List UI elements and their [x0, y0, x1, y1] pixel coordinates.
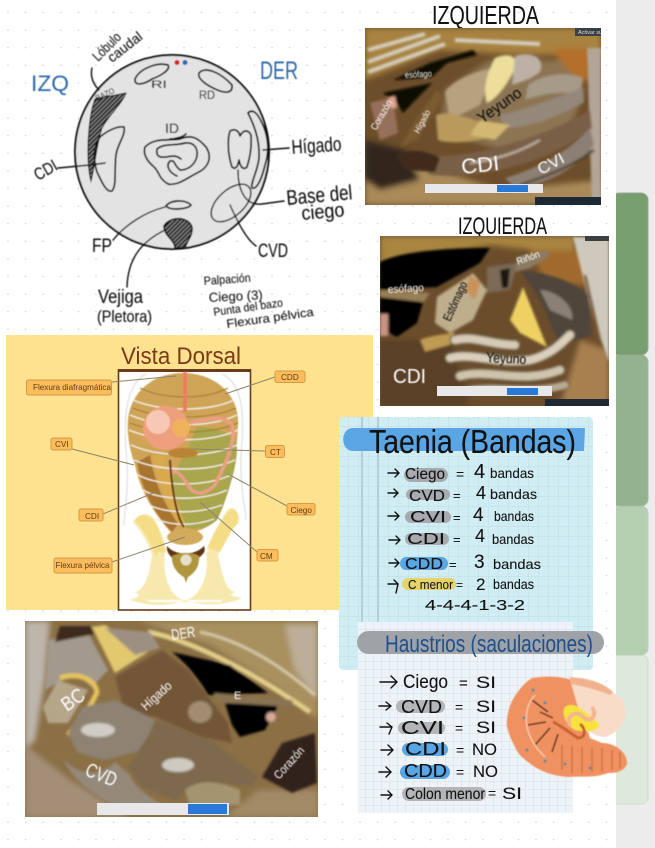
row: CDI: bandas: [492, 531, 534, 547]
photo labels: Yeyuno: [475, 85, 525, 127]
heading: IZQ: IZQ: [31, 71, 69, 96]
title bar: [343, 428, 585, 451]
pale stripes top left: [368, 34, 540, 72]
organ: CDI: [95, 127, 124, 191]
photo labels: esófago: [388, 282, 424, 296]
organ: small intestine ID: ID: [165, 120, 179, 136]
note: palpation list: Palpación: [203, 271, 251, 288]
row: CVI: 4: [473, 505, 484, 526]
organ: RD kidney: [199, 70, 232, 102]
row: CDI: =: [453, 532, 461, 547]
esophagus: [183, 372, 187, 412]
panel: Haustrios (saculaciones): [357, 622, 604, 813]
row: Ciego: Ciego: [405, 466, 445, 483]
row: CDI: CDI: [407, 531, 445, 548]
label: Flexura diafragmática: Flexura diafragmática: [33, 383, 111, 392]
label: Flexura pélvica: [54, 558, 112, 573]
row: CDD: CDD: [405, 556, 443, 573]
row: Colon menor: [381, 784, 522, 803]
photo labels: Estómago: [440, 279, 471, 323]
organ: right crescent: [248, 111, 268, 188]
row: Colon menor: Colon menor: [405, 786, 486, 803]
aorta and vena cava dots: [174, 60, 188, 65]
note: palpation list: [203, 271, 315, 331]
label: Lóbulo caudal: caudal: [104, 28, 145, 65]
row: CVI: SI: [476, 718, 496, 737]
row: Ciego: =: [459, 675, 468, 692]
row: C menor: bandas: [493, 576, 534, 592]
label: Base del ciego: Base del: [285, 181, 353, 210]
title: Taenia (Bandas): [369, 423, 576, 460]
row: Ciego: 4: [474, 461, 485, 483]
organ: bladder hatched: [164, 219, 192, 248]
photo labels: Corazón: [369, 98, 395, 132]
photo: left side dissection with jejunum: [365, 28, 605, 205]
illustration: dorsal view of the horse colon: [124, 372, 246, 605]
row: CVD: CVD: [409, 488, 445, 505]
label: CM: [257, 550, 278, 561]
organ: RI kidney: [135, 64, 169, 91]
row: CVD: SI: [476, 697, 496, 716]
row: Ciego: bandas: [490, 465, 534, 481]
band count summary: 4-4-4-1-3-2: [425, 597, 525, 614]
gray bulb: [68, 700, 155, 760]
photo labels: [57, 624, 307, 792]
label: CDD: CDD: [281, 373, 299, 382]
body outline: [124, 374, 246, 525]
label: CDI: CDI: [85, 512, 99, 521]
heading: DER: DER: [260, 57, 298, 85]
sacculations: [562, 745, 620, 773]
large colon: [128, 373, 238, 535]
title bar: [357, 631, 604, 654]
label: Vejiga (Pletora): (Pletora): [97, 307, 152, 326]
descending colon: [137, 455, 178, 532]
organ: pelvic flexure FP: [166, 201, 191, 209]
row: CDD: 3: [474, 552, 485, 573]
row: CVD: CVD: [401, 697, 442, 717]
heading: IZQUIERDA top: IZQUIERDA: [432, 0, 539, 30]
black cavity: [172, 652, 268, 695]
organ: base of cecum oval: [204, 177, 258, 229]
photo labels: CVI: [535, 150, 568, 179]
row: CVD: [388, 483, 537, 505]
row: C menor: 2: [476, 575, 485, 594]
row: CVI: [380, 718, 496, 738]
jejunum loops: [450, 335, 570, 390]
row: Colon menor: SI: [502, 784, 522, 803]
row: CDD: CDD: [404, 761, 447, 781]
row: C menor: C menor: [408, 577, 454, 592]
CVD band: [63, 759, 161, 803]
cecum green: [172, 427, 237, 529]
row: CVI: CVI: [401, 718, 444, 738]
title: Haustrios (saculaciones): [385, 631, 593, 658]
label: Flexura pélvica: Flexura pélvica: [56, 561, 110, 570]
photo labels: Hígado: [412, 108, 433, 135]
row: Ciego: Ciego: [403, 672, 448, 693]
label: Hígado: Hígado: [291, 134, 342, 159]
row: CVD: bandas: [490, 486, 537, 502]
pale loops: [570, 680, 626, 737]
label: Vejiga (Pletora): [97, 230, 165, 326]
organ: spleen hatched: [88, 86, 126, 181]
photo labels: BC: [57, 684, 90, 716]
label: Vejiga (Pletora): Vejiga: [98, 287, 143, 308]
photo labels: [388, 249, 542, 388]
label: CVI: [51, 438, 72, 450]
row: CVI: =: [455, 720, 463, 736]
label: Base del ciego: ciego: [301, 199, 345, 225]
row: CDD: bandas: [493, 556, 541, 572]
small colon tube: [168, 418, 233, 493]
overlay bar: [97, 803, 229, 815]
liver: [115, 650, 232, 743]
photo: left side dissection with jejunum: Activar sus: [578, 30, 605, 36]
overlay bar: [425, 184, 543, 193]
overlay bar: [437, 386, 552, 396]
organ: small intestine ID: [144, 120, 209, 184]
pelvic flexure: [167, 529, 203, 545]
label: CVD: [230, 205, 288, 262]
right dorsal dark fold: [170, 460, 184, 527]
organ: RI kidney: RI: [151, 79, 167, 91]
organ: CVD molar shape: [228, 130, 251, 168]
yellow mesentery: [564, 705, 600, 731]
label: CT: CT: [270, 448, 281, 457]
photo labels: CDI: [393, 366, 426, 388]
label: FP: FP: [92, 236, 112, 257]
illustration: haustrated colon: [507, 677, 627, 777]
BC: [43, 680, 88, 723]
organ: RD kidney: RD: [199, 88, 215, 102]
row: CDI: 4: [475, 526, 485, 546]
photo labels: Yeyuno: [486, 349, 527, 367]
row: CDI: =: [456, 742, 464, 758]
row: CVI: [388, 505, 534, 526]
pelvis: [130, 508, 242, 605]
row: Ciego: [380, 672, 496, 693]
note: palpation list: Ciego (3): [208, 287, 263, 305]
orange body: [507, 677, 627, 777]
row: CVD: [379, 697, 496, 717]
label: CVD: CVD: [258, 241, 288, 262]
photo labels: Riñón: [515, 249, 542, 268]
photo labels: Hígado: [138, 678, 175, 713]
upper intestine gray: [45, 633, 108, 690]
label: Hígado: [263, 134, 342, 159]
photo labels: esófago: [405, 69, 432, 80]
row: Ciego: SI: [476, 673, 496, 692]
heading: IZQUIERDA second: IZQUIERDA: [458, 213, 547, 240]
photo labels: E: [234, 690, 241, 702]
label: Ciego: Ciego: [290, 506, 312, 515]
row: CVI: CVI: [410, 509, 446, 526]
lower bulb: [128, 720, 258, 800]
row: CVI: =: [453, 510, 461, 525]
label: Ciego: [287, 504, 315, 515]
transverse colon: [168, 448, 198, 458]
label: CDI: [79, 509, 103, 521]
label: CDI: [30, 156, 105, 184]
label: Base del ciego: [238, 170, 353, 225]
row: CDI: NO: [472, 740, 497, 759]
row: C menor: =: [456, 578, 463, 592]
row: CVD: =: [455, 699, 463, 715]
row: CDD: [389, 552, 541, 573]
note: palpation list: Flexura pélvica: [225, 305, 315, 331]
row: CVD: 4: [476, 483, 486, 503]
photo labels: CVD: [82, 759, 120, 792]
row: Colon menor: =: [488, 785, 496, 801]
inner fold: [553, 722, 584, 738]
rib stripes: [129, 400, 238, 524]
row: Ciego: [388, 461, 534, 483]
anatomical figure frame: [118, 369, 251, 610]
label: CVI: CVI: [55, 440, 69, 449]
rectum and bladder: [167, 546, 205, 558]
pink stomach: [143, 406, 189, 450]
heart: [262, 733, 317, 793]
label: CDI: CDI: [30, 156, 61, 184]
panel: Vista Dorsal: [6, 335, 373, 610]
photo labels: DER: [170, 624, 196, 644]
photo labels: [369, 69, 568, 179]
label: Flexura diafragmática: [26, 380, 112, 395]
panel: Taenia (Bandas): [339, 417, 593, 670]
row: C menor: [388, 575, 534, 594]
row: CDD: [379, 761, 498, 781]
row: CVI: bandas: [494, 508, 534, 524]
abdominal circle: [75, 55, 269, 249]
photo: left side dissection with stomach: [380, 236, 609, 406]
row: CDD: =: [456, 764, 464, 780]
leader lines: [72, 376, 287, 562]
sidebar with green tabs: [601, 0, 655, 848]
diagram: transverse section of the abdomen: [30, 28, 353, 331]
heading: Vista Dorsal: Vista Dorsal: [121, 343, 241, 370]
large colon bands: [415, 110, 592, 176]
row: CDI: [381, 739, 497, 759]
row: CDD: NO: [473, 762, 498, 781]
row: CVD: =: [453, 488, 461, 503]
note: palpation list: Punta del bazo: [213, 297, 284, 319]
row: CDI: [389, 526, 534, 548]
label: Lóbulo caudal: [89, 28, 145, 90]
row: CDD: =: [449, 557, 457, 572]
row: Ciego: =: [456, 466, 464, 482]
photo labels: CDI: [460, 152, 500, 179]
photo: right side dissection with liver: [25, 621, 318, 817]
photo labels: Corazón: [271, 744, 307, 782]
label: CDD: [275, 371, 305, 382]
label: FP: [92, 207, 165, 257]
label: CM: CM: [260, 552, 273, 561]
label: CT: [266, 446, 284, 458]
row: CDI: CDI: [405, 739, 446, 759]
organ: spleen hatched: BAZO: [94, 86, 116, 103]
label: Lóbulo caudal: Lóbulo: [89, 29, 124, 64]
